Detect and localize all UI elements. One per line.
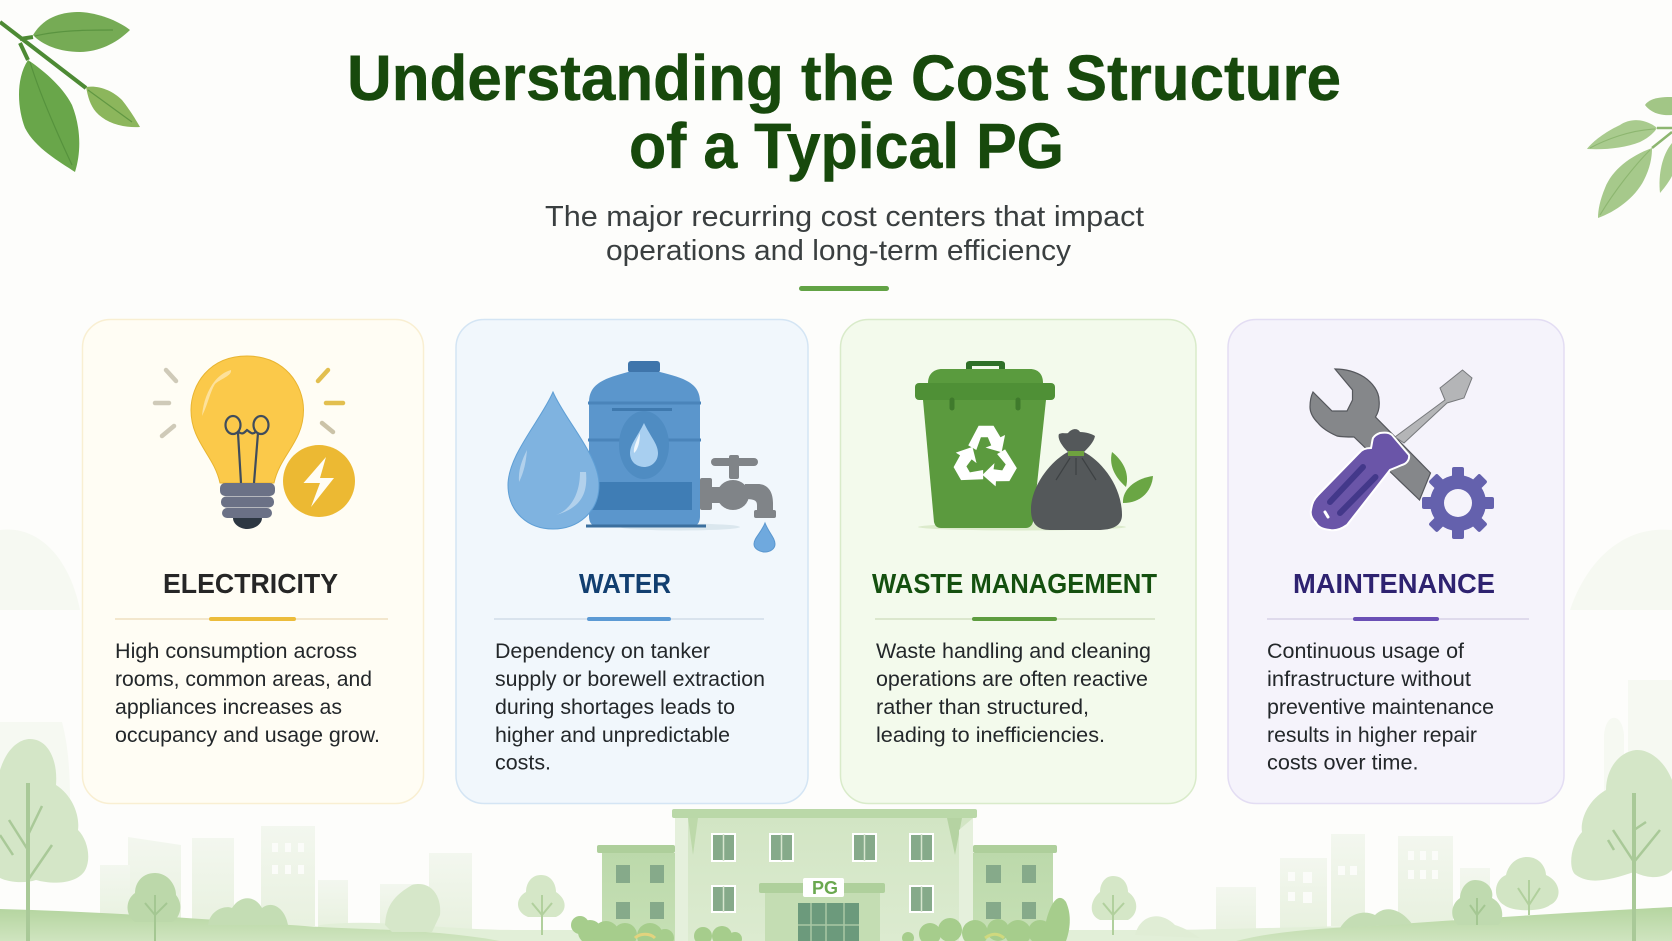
description: Continuous usage of (1267, 640, 1464, 663)
panel: electricity (82, 320, 424, 804)
title: of a Typical PG (629, 110, 1064, 182)
big drop (508, 392, 599, 529)
tank (628, 361, 660, 373)
divider (875, 617, 1155, 621)
panel: maintenance (1228, 320, 1564, 804)
description: results in higher repair (1267, 724, 1477, 747)
screwdriver shaft (1395, 370, 1472, 443)
description (115, 640, 380, 747)
big left tree (0, 739, 88, 941)
right wing (973, 853, 1053, 941)
leaves: top left (0, 12, 140, 172)
title accent bar (799, 286, 889, 291)
rays (155, 370, 176, 436)
city skyline right (1216, 834, 1490, 935)
divider (494, 617, 764, 621)
description: operations are often reactive (876, 668, 1148, 691)
panel: waste management (840, 320, 1196, 804)
heading: ELECTRICITY (163, 568, 338, 599)
description (876, 640, 1151, 747)
description: infrastructure without (1267, 668, 1471, 691)
icon: wrench, screwdriver and gear (1310, 369, 1494, 539)
description: rooms, common areas, and (115, 668, 372, 691)
landscape background (0, 530, 1672, 941)
drip (754, 523, 775, 552)
windows (712, 834, 933, 912)
left wing (602, 853, 675, 941)
description: preventive maintenance (1267, 696, 1494, 719)
description (495, 640, 765, 774)
description: higher and unpredictable (495, 724, 730, 747)
PG sign (803, 878, 844, 898)
big right tree (1571, 750, 1672, 941)
icon: recycling bin and bag (915, 361, 1153, 530)
right ground hill (1236, 907, 1672, 941)
description: occupancy and usage grow. (115, 724, 380, 747)
subtitle: The major recurring cost centers that impact (545, 201, 1144, 233)
tap (700, 478, 712, 510)
wrench (1310, 369, 1430, 500)
divider (115, 617, 388, 621)
leaves: top right (1587, 97, 1672, 218)
description: appliances increases as (115, 696, 342, 719)
divider (1267, 617, 1529, 621)
bin (966, 361, 1005, 372)
heading: WASTE MANAGEMENT (872, 568, 1157, 599)
title: Understanding the Cost Structure (347, 42, 1341, 114)
recycle symbol (948, 426, 1022, 491)
icon: light bulb (155, 356, 355, 529)
coin with bolt (283, 445, 355, 517)
subtitle: operations and long-term efficiency (606, 235, 1072, 267)
bushes by the building (571, 898, 1070, 941)
PG sign: PG (812, 878, 838, 898)
heading: WATER (579, 568, 671, 599)
description: rather than structured, (876, 696, 1089, 719)
faint distant trees (0, 530, 1672, 860)
gear (1422, 467, 1494, 539)
small trees (128, 857, 1559, 941)
screwdriver handle (1311, 433, 1409, 530)
description: leading to inefficiencies. (876, 724, 1105, 747)
light mid ground (300, 923, 1400, 941)
heading: MAINTENANCE (1293, 568, 1495, 599)
description: High consumption across (115, 640, 357, 663)
main block (675, 818, 973, 941)
description: during shortages leads to (495, 696, 735, 719)
description: costs. (495, 752, 551, 774)
description: Dependency on tanker (495, 640, 710, 663)
PG building (597, 809, 1057, 941)
subtitle (545, 201, 1144, 267)
description (1267, 640, 1494, 774)
entrance (765, 893, 880, 941)
city skyline left (100, 826, 472, 929)
icon: water tank, drop and tap (508, 361, 776, 552)
description: supply or borewell extraction (495, 668, 765, 691)
title (347, 42, 1341, 182)
left ground hill (0, 909, 500, 941)
description: costs over time. (1267, 752, 1418, 774)
bag (1031, 429, 1122, 530)
panel: water (456, 320, 808, 804)
leaves beside bag (1111, 452, 1127, 487)
description: Waste handling and cleaning (876, 640, 1151, 663)
